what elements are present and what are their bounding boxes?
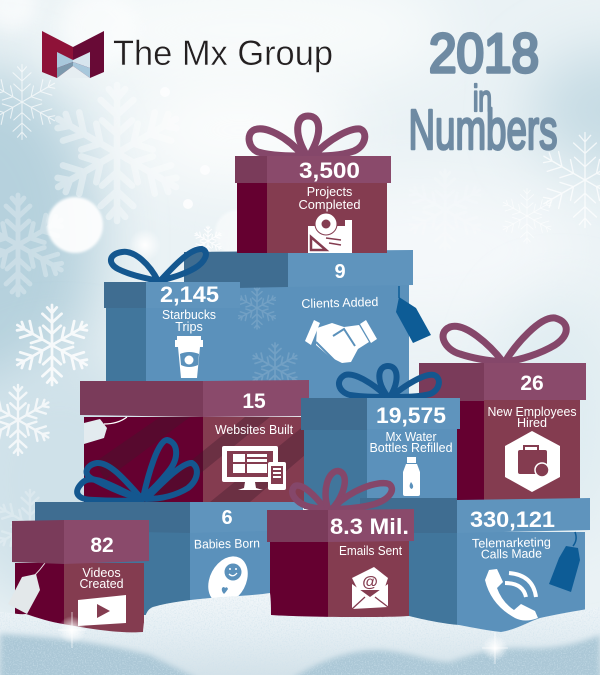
box body bbox=[15, 563, 64, 632]
number: 2,145 bbox=[160, 282, 219, 307]
logo: The Mx Group bbox=[42, 31, 333, 78]
gift: websites built bbox=[77, 380, 309, 502]
gift: projects completed: Completed bbox=[298, 198, 360, 212]
logo wordmark: The Mx Group bbox=[113, 34, 333, 73]
number: 19,575 bbox=[376, 403, 446, 428]
box body bbox=[106, 308, 146, 381]
gift: projects completed bbox=[235, 116, 391, 253]
label: Telemarketing bbox=[472, 535, 551, 551]
lid bbox=[104, 282, 146, 308]
lid bbox=[12, 520, 64, 564]
label: Emails Sent bbox=[339, 544, 402, 558]
label: Babies Born bbox=[194, 536, 260, 552]
gift: telemarketing calls made bbox=[360, 498, 590, 632]
icon: handshake bbox=[305, 320, 377, 363]
title: 2018 in Numbers bbox=[408, 22, 558, 162]
box body bbox=[40, 530, 190, 615]
gift: new employees hired bbox=[419, 318, 586, 502]
box body bbox=[237, 183, 267, 253]
title: 2018 in Numbers: in bbox=[473, 78, 492, 119]
gift: clients added bbox=[184, 250, 431, 410]
label: Mx Water bbox=[386, 430, 436, 444]
ribbon bow bbox=[111, 249, 206, 281]
lid bbox=[360, 498, 457, 533]
number: 9 bbox=[334, 261, 346, 283]
icon: envelope: @ bbox=[362, 574, 378, 591]
lid bbox=[184, 251, 288, 289]
label: Projects bbox=[307, 185, 352, 199]
icon: phone bbox=[485, 569, 538, 620]
lid bbox=[267, 510, 328, 542]
blue tag bbox=[549, 532, 580, 592]
gift: starbucks trips bbox=[104, 249, 240, 381]
box body bbox=[230, 285, 409, 410]
icon: swaddled baby bbox=[200, 549, 256, 611]
gift: water bottles refilled bbox=[301, 366, 460, 509]
title: 2018 in Numbers: 2018 bbox=[429, 22, 539, 84]
number: 330,121 bbox=[470, 507, 555, 532]
box body bbox=[304, 429, 367, 509]
label: Videos bbox=[82, 566, 121, 580]
gift: new employees hired: Hired bbox=[517, 416, 547, 430]
lid bbox=[80, 381, 203, 417]
label: Clients Added bbox=[301, 295, 379, 311]
gift: telemarketing calls made: Calls Made bbox=[481, 546, 542, 562]
label: New Employees bbox=[488, 405, 576, 419]
blue tag bbox=[396, 286, 431, 343]
white tag bbox=[84, 417, 127, 444]
icon: envelope bbox=[352, 567, 388, 609]
box body bbox=[270, 541, 328, 617]
gift: starbucks trips: Trips bbox=[175, 320, 203, 334]
gift: water bottles refilled: Bottles Refilled bbox=[370, 441, 452, 455]
ribbon bow bbox=[443, 318, 566, 362]
gift: videos created bbox=[8, 520, 149, 635]
label: Starbucks bbox=[162, 308, 216, 322]
gift: babies born bbox=[35, 502, 305, 615]
icon: plans and gear bbox=[308, 213, 352, 253]
box body bbox=[360, 532, 457, 628]
lid bbox=[301, 398, 367, 430]
white tag bbox=[8, 563, 45, 614]
number: 26 bbox=[520, 372, 544, 395]
label: Websites Built bbox=[215, 423, 293, 437]
lid bbox=[235, 156, 267, 183]
box body bbox=[457, 400, 484, 502]
snow sparkles bbox=[58, 616, 86, 644]
icon: water bottle bbox=[403, 457, 420, 496]
number: 6 bbox=[221, 507, 233, 529]
icon: computer and tablet bbox=[222, 446, 286, 490]
logo mark bbox=[42, 31, 104, 78]
number: 8.3 Mil. bbox=[330, 514, 409, 539]
icon: video play bbox=[78, 595, 126, 626]
number: 82 bbox=[90, 534, 114, 557]
number: 15 bbox=[242, 390, 266, 413]
snow drift bbox=[0, 585, 600, 675]
diagonal stripes bbox=[95, 417, 305, 502]
ribbon bow bbox=[339, 366, 439, 397]
gift: videos created: Created bbox=[80, 577, 124, 591]
ribbon bow bbox=[77, 440, 197, 501]
number: 3,500 bbox=[299, 158, 360, 183]
icon: hexagon briefcase bbox=[505, 431, 560, 492]
lid bbox=[35, 502, 190, 533]
ribbon bow bbox=[292, 471, 392, 509]
box body bbox=[84, 417, 203, 502]
ribbon bow bbox=[249, 116, 365, 156]
gift: emails sent bbox=[267, 471, 414, 617]
lid bbox=[419, 363, 484, 401]
icon: coffee cup bbox=[175, 336, 203, 378]
